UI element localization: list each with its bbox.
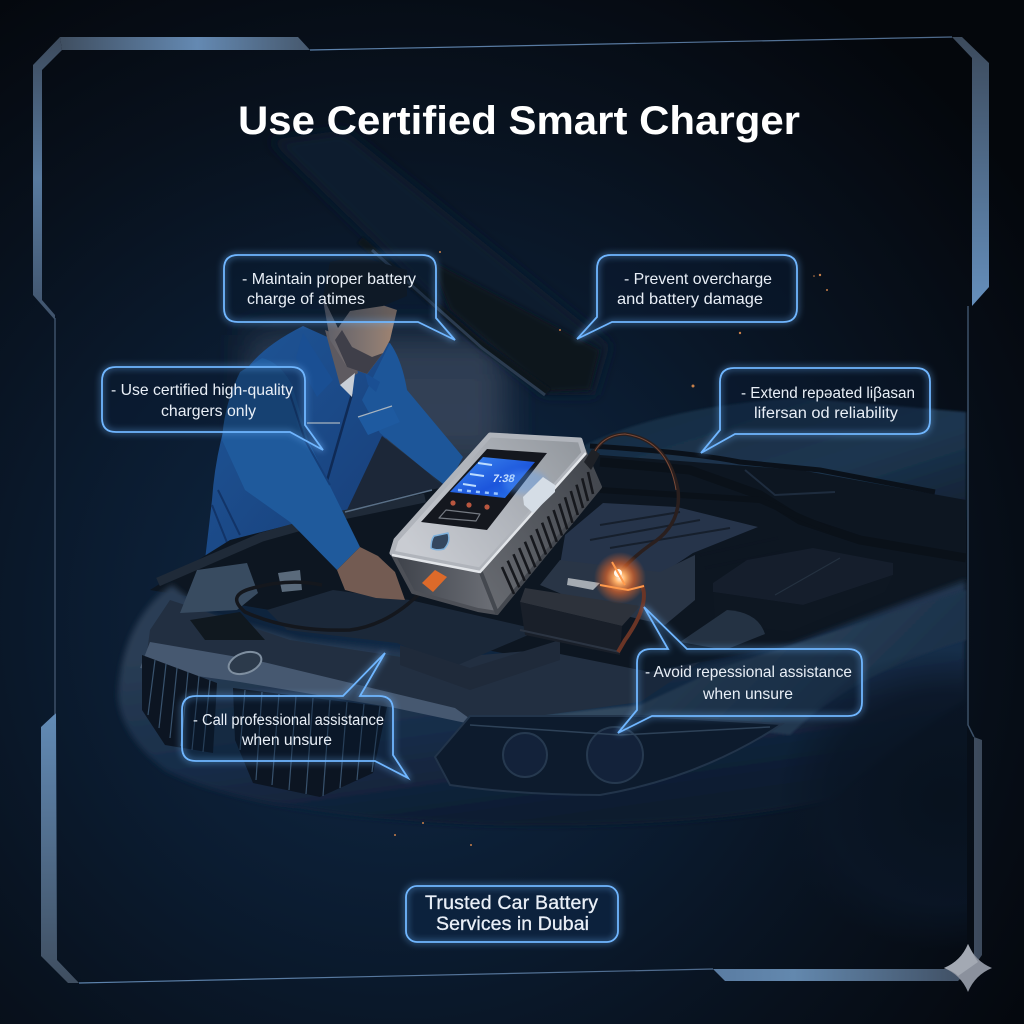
charger glow patch bbox=[503, 470, 547, 494]
badge: trusted services bbox=[406, 886, 618, 942]
charger logo bbox=[431, 533, 449, 550]
callout: extend lifespan: lifersan od reliability bbox=[754, 405, 898, 422]
callout: extend lifespan bbox=[701, 368, 930, 453]
badge: trusted services: Services in Dubai bbox=[436, 913, 589, 935]
ember particles bbox=[394, 251, 828, 846]
status lights bbox=[450, 500, 490, 510]
callout: avoid repessional: when unsure bbox=[702, 686, 793, 703]
raised hood bbox=[270, 130, 610, 395]
callout: extend lifespan: - Extend repəated liβasan bbox=[741, 385, 915, 402]
engine cover bbox=[540, 503, 783, 625]
charger clip bbox=[523, 477, 555, 513]
charger top face bbox=[392, 435, 584, 570]
smart charger bbox=[392, 435, 600, 613]
sparks at battery terminal bbox=[594, 552, 646, 604]
callout: call professional bbox=[182, 653, 408, 778]
collar bbox=[296, 333, 333, 397]
hood front panel bbox=[145, 600, 700, 724]
callout: prevent overcharge: - Prevent overcharge bbox=[624, 271, 772, 288]
windshield and cowl bbox=[585, 398, 966, 520]
badge bbox=[228, 650, 262, 676]
sparkle star icon bbox=[944, 944, 992, 992]
intake tube bbox=[680, 610, 765, 650]
near arm bbox=[222, 358, 360, 570]
callout: maintain charge bbox=[224, 255, 455, 340]
blue display: 7:38 bbox=[491, 473, 516, 485]
title: Use Certified Smart Charger bbox=[238, 99, 800, 143]
blurred garage backdrop bbox=[250, 335, 505, 495]
callout: maintain charge: charge of atimes bbox=[247, 291, 365, 308]
clamp cable bbox=[584, 434, 678, 652]
callout: avoid repessional: - Avoid repessional assistance bbox=[645, 664, 852, 681]
head bbox=[323, 290, 397, 374]
label plate bbox=[439, 510, 480, 521]
badge: trusted services: Trusted Car Battery bbox=[425, 892, 598, 914]
left-side engine parts bbox=[180, 563, 560, 664]
charger lower front bbox=[392, 553, 497, 613]
battery bbox=[520, 578, 640, 655]
callout: avoid repessional bbox=[618, 607, 862, 733]
callout: maintain charge: - Maintain proper battery bbox=[242, 271, 416, 288]
air filter box bbox=[713, 548, 893, 632]
mechanic torso bbox=[205, 326, 446, 560]
callout: certified chargers: chargers only bbox=[161, 403, 256, 420]
callout: call professional: when unsure bbox=[241, 732, 332, 749]
engine bay bbox=[150, 446, 966, 672]
black charging cable bbox=[237, 582, 424, 630]
charger side vents panel bbox=[480, 450, 600, 613]
callout: certified chargers bbox=[102, 367, 323, 450]
far arm bbox=[362, 343, 463, 487]
callout: prevent overcharge: and battery damage bbox=[617, 291, 763, 308]
headlight bbox=[435, 716, 782, 795]
callout: certified chargers: - Use certified high-quality bbox=[111, 382, 293, 399]
callout: prevent overcharge bbox=[577, 255, 797, 339]
callout: call professional: - Call professional assistance bbox=[193, 712, 384, 729]
neck bbox=[325, 330, 358, 385]
mechanic sleeves, hand and head bbox=[222, 256, 463, 600]
radiator grille bbox=[142, 655, 387, 797]
blue display bbox=[450, 457, 535, 498]
hand bbox=[337, 547, 405, 600]
car front body bbox=[116, 563, 967, 924]
chest pockets bbox=[358, 406, 400, 435]
hair bbox=[323, 256, 407, 328]
orange plug bbox=[422, 570, 447, 592]
display bezel bbox=[421, 449, 547, 530]
